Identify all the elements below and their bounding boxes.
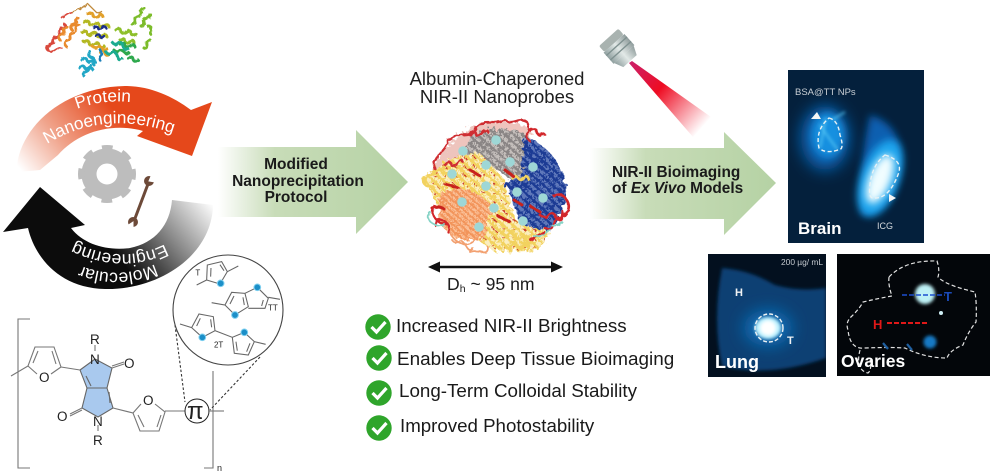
atom labels: O <box>143 393 154 408</box>
concentration label: 200 µg/ mL <box>781 257 823 267</box>
panel title: Lung <box>715 352 759 372</box>
nanoprobe title: NIR-II Nanoprobes <box>420 86 574 107</box>
dashed tissue outline <box>847 261 976 373</box>
atom labels: N <box>90 352 100 367</box>
arrow label: Nanoprecipitation <box>232 173 364 190</box>
check item 3: Long-Term Colloidal Stability <box>399 380 638 401</box>
tumor signal <box>915 284 935 304</box>
checklist <box>365 314 674 441</box>
atom labels <box>39 332 222 473</box>
tumor label: T <box>944 289 952 304</box>
label: Molecular: Molecular <box>78 264 158 284</box>
icon: wrench <box>127 174 155 229</box>
hydrodynamic diameter label: D <box>447 274 460 294</box>
tumor label: T <box>787 335 794 347</box>
panel: ovaries image <box>837 254 990 376</box>
icon: microscope objective <box>598 28 640 71</box>
atom labels: N <box>93 414 103 429</box>
label: Protein: Protein <box>74 88 130 108</box>
red dashed line <box>887 322 927 324</box>
atom labels: π <box>187 398 204 425</box>
brackets <box>18 319 213 468</box>
atom labels: O <box>124 356 135 371</box>
size arrow <box>428 262 563 272</box>
label: Nanoengineering: Nanoengineering <box>42 110 175 144</box>
check item 1: Increased NIR-II Brightness <box>396 315 627 336</box>
reference dye label: ICG <box>877 221 893 231</box>
thiophene units: T <box>195 268 200 277</box>
encapsulated dye cores <box>447 135 548 232</box>
healthy label: H <box>735 287 743 299</box>
nanoparticle illustration <box>424 120 569 252</box>
blue dashed line <box>902 294 945 296</box>
pi circle <box>185 399 209 423</box>
laser beam <box>629 61 711 137</box>
dashed regions of interest <box>818 118 842 152</box>
atom labels: O <box>39 370 50 385</box>
hydrodynamic diameter label: ~ 95 nm <box>466 274 535 294</box>
check item 2: Enables Deep Tissue Bioimaging <box>397 349 674 370</box>
arrow: modified nanoprecipitation protocol <box>218 130 408 234</box>
protein domains <box>424 121 566 252</box>
chemical structure: DPP polymer <box>11 255 283 473</box>
red arrow: protein nanoengineering <box>18 86 212 171</box>
probe label: BSA@TT NPs <box>795 87 856 98</box>
arrow: NIR-II bioimaging <box>590 132 776 235</box>
dashed tumor outline <box>755 314 783 342</box>
atom labels: R <box>90 332 100 347</box>
atom labels: R <box>93 433 103 448</box>
atom labels: n <box>217 463 222 473</box>
right furan <box>113 404 185 431</box>
arrow label: Modified <box>264 156 328 173</box>
protein chain strands <box>424 120 569 252</box>
label: Engineering: Engineering <box>72 240 168 266</box>
panel: lung image <box>708 254 826 377</box>
check item 4: Improved Photostability <box>400 415 595 436</box>
left furan <box>11 347 80 376</box>
dashed zoom lines <box>175 325 260 410</box>
icon: gear <box>81 148 133 200</box>
arrowheads <box>811 112 896 202</box>
protein crystal structure <box>47 4 151 76</box>
N-substituents and carbonyl bonds <box>70 345 124 431</box>
atom labels: O <box>57 409 68 424</box>
thiophene units: 2T <box>214 340 223 349</box>
panel: brain image <box>788 70 924 243</box>
DPP core <box>80 359 113 417</box>
secondary signals <box>883 311 943 350</box>
nanoprobe title: Albumin-Chaperoned <box>410 68 584 89</box>
thiophene units <box>180 262 280 355</box>
arrow label: of Ex Vivo Models <box>612 180 743 197</box>
thiophene units: TT <box>268 304 278 313</box>
panel title: Ovaries <box>841 351 905 371</box>
arrow label: NIR-II Bioimaging <box>612 164 740 181</box>
healthy label: H <box>873 317 882 332</box>
check item 4 <box>366 415 595 441</box>
arrow label: Protocol <box>265 189 327 206</box>
black arrow: molecular engineering <box>3 187 212 289</box>
hydrodynamic diameter label: h <box>460 283 466 295</box>
zoom circle <box>173 255 283 365</box>
panel title: Brain <box>798 219 841 238</box>
